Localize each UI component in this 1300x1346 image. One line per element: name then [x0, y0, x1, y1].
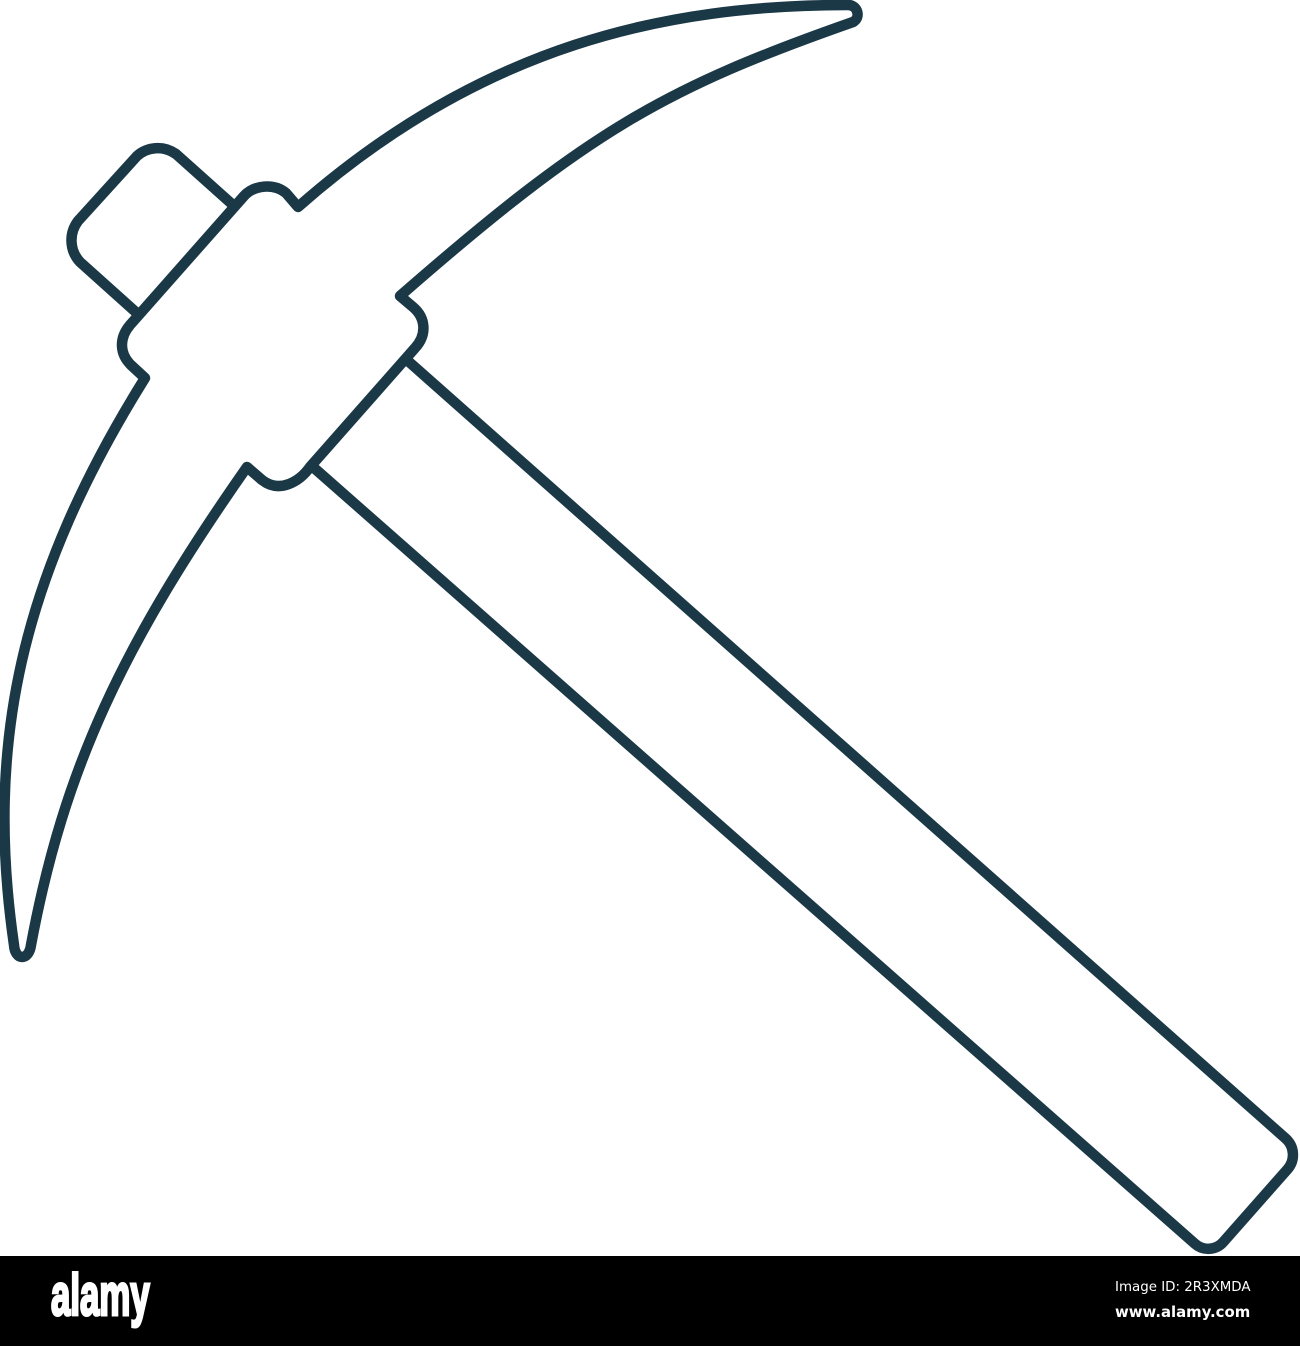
- footer logo: alamy: [51, 1263, 150, 1328]
- pick butt end: [71, 148, 233, 314]
- footer bar: [0, 1256, 1300, 1346]
- site url: www.alamy.com: [1115, 1303, 1250, 1321]
- image id: Image ID: 2R3XMDA: [1115, 1280, 1251, 1295]
- pick head blade: [4, 5, 858, 957]
- handle: [313, 361, 1293, 1249]
